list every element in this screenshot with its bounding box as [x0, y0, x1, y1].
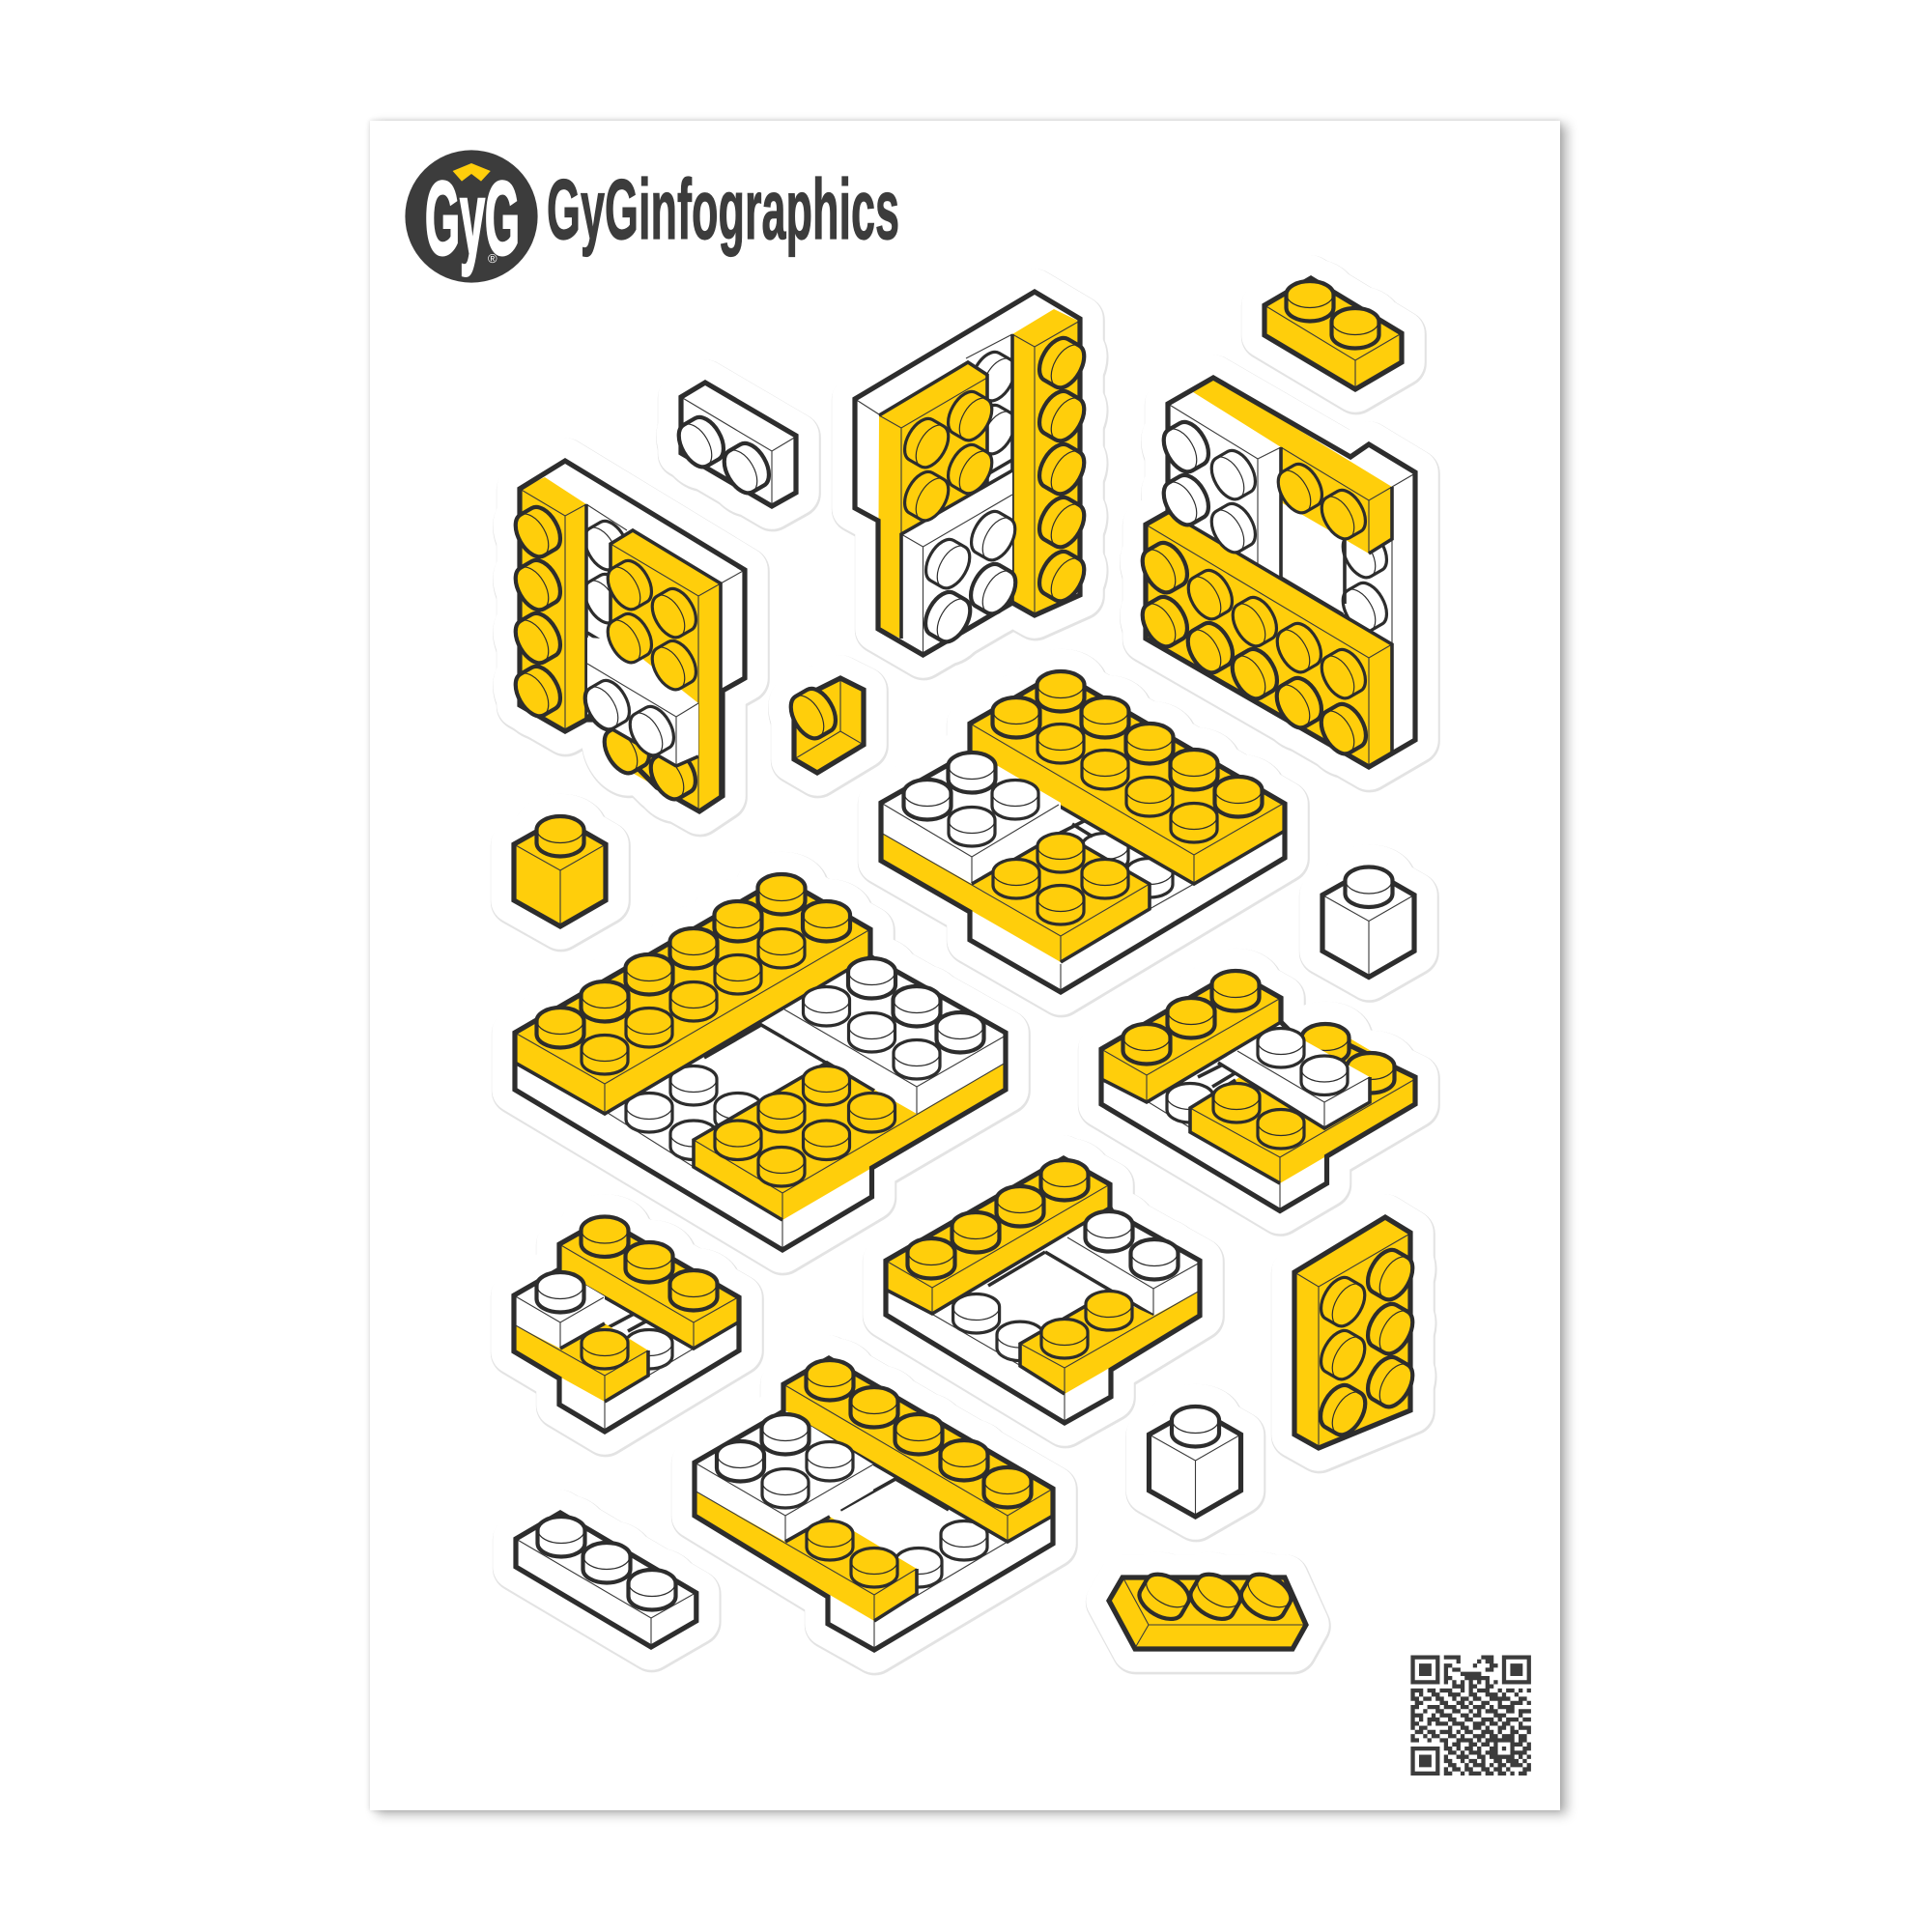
sticker: flat brick letter upper centre	[881, 672, 1286, 993]
logo chevron	[453, 163, 491, 182]
sticker: letter built of upright bricks, left	[509, 461, 746, 812]
sticker: yellow six-stud wall plate	[1294, 1217, 1419, 1449]
logo badge: GyG	[425, 159, 520, 276]
sticker: white cube brick lower	[1150, 1406, 1241, 1518]
paper sheet	[370, 121, 1560, 1810]
sticker: flat brick letter lower centre	[886, 1158, 1201, 1424]
sticker: yellow cube brick left	[514, 817, 607, 927]
sticker: white 2-stud wall plate	[672, 383, 797, 507]
sticker: white cube brick right	[1322, 867, 1415, 979]
sticker: yellow 3-stud tilted plate	[1109, 1568, 1307, 1650]
sticker: small flat brick letter left	[514, 1217, 740, 1433]
sticker: letter built of upright bricks, right	[1136, 378, 1416, 768]
sticker: yellow 2-stud plate top right	[1264, 278, 1403, 390]
sticker: flat brick letter right middle	[1101, 972, 1416, 1212]
sticker: largest flat brick letter	[515, 875, 1007, 1251]
sticker: letter built of upright bricks, centre	[855, 292, 1091, 656]
registered mark: ®	[488, 251, 497, 266]
sticker: yellow single-stud wall brick	[784, 678, 865, 774]
QR code	[1410, 1658, 1531, 1774]
sticker: flat brick letter bottom centre	[695, 1358, 1054, 1651]
brand wordmark: GyGinfographics	[547, 161, 899, 257]
logo badge	[405, 150, 538, 283]
sticker: white 3-stud plate	[516, 1513, 697, 1648]
